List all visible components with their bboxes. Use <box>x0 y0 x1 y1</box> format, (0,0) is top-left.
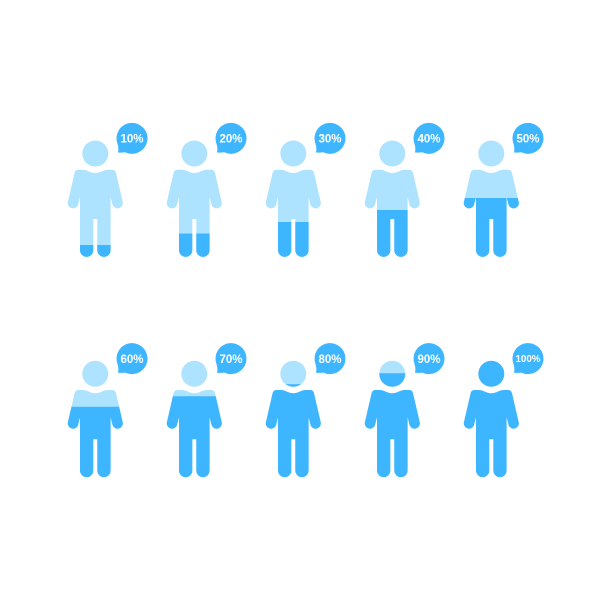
person 20% <box>167 123 247 257</box>
person 20%: 20% <box>219 134 243 146</box>
person 90%: 90% <box>417 354 441 366</box>
person 80% <box>266 343 346 477</box>
person 90% <box>365 343 445 477</box>
person 70% <box>167 343 247 477</box>
person 100%: 100% <box>515 354 541 365</box>
person 60%: 60% <box>120 354 144 366</box>
person 30%: 30% <box>318 134 342 146</box>
person 80%: 80% <box>318 354 342 366</box>
person 100% <box>464 343 544 477</box>
person 60% <box>68 343 148 477</box>
person 70%: 70% <box>219 354 243 366</box>
person 50% <box>464 123 544 257</box>
person 10% <box>68 123 148 257</box>
person 30% <box>266 123 346 257</box>
person 50%: 50% <box>516 134 540 146</box>
person 40%: 40% <box>417 134 441 146</box>
person 10%: 10% <box>120 134 144 146</box>
person 40% <box>365 123 445 257</box>
